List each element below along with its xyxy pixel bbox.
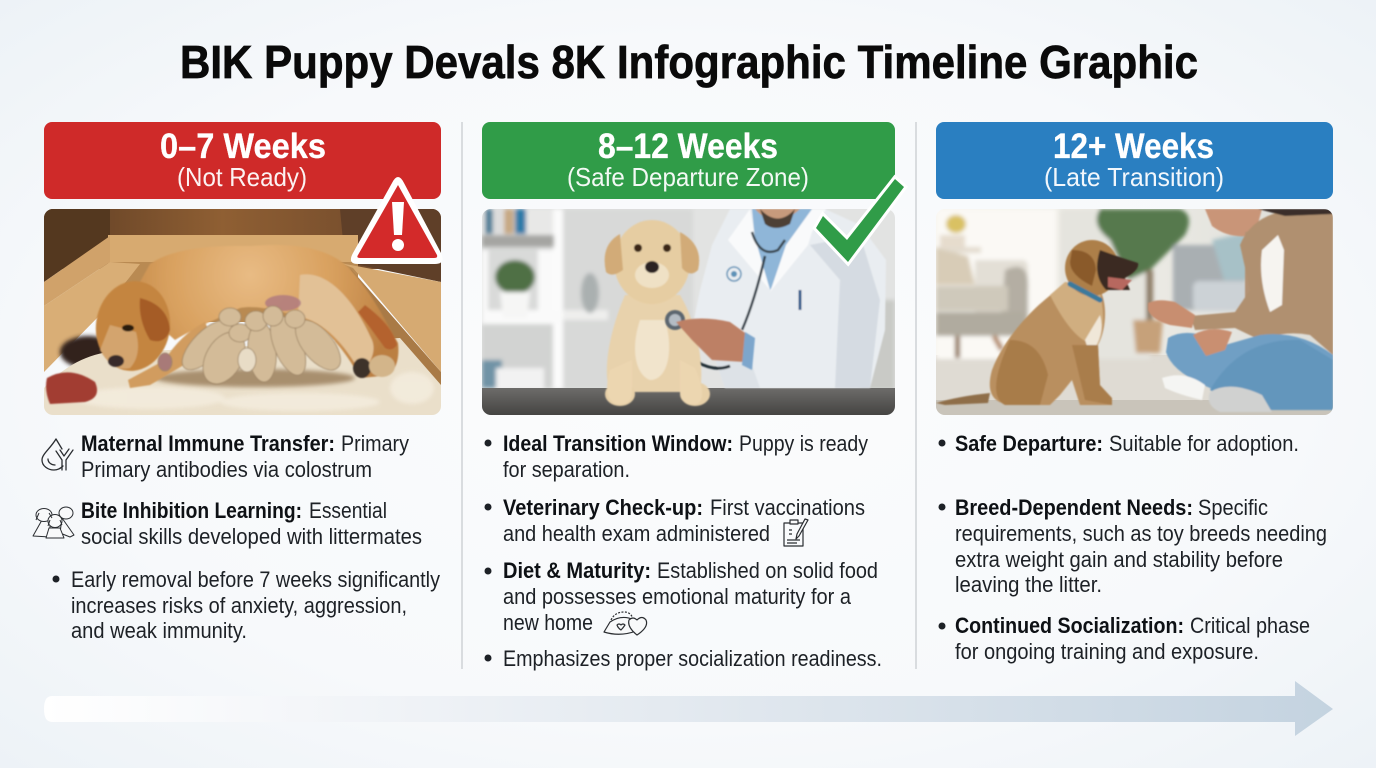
text: ideal transition window: for separation.: [503, 457, 630, 482]
header: 0-7 weeks not ready: [44, 122, 441, 199]
text: early removal warning: Early removal before 7 weeks significantly: [71, 567, 440, 592]
text: maternal immune transfer: Primary antibodies via colostrum: [81, 457, 372, 482]
text: veterinary check-up: and health exam administered: [503, 521, 770, 546]
panel: 0-7 weeks: [33, 122, 443, 643]
text: breed-dependent needs: Breed-Dependent Needs:: [955, 495, 1193, 520]
text: breed-dependent needs: [938, 495, 1327, 597]
panel: 12+ weeks: [936, 122, 1333, 664]
arrow: timeline progression: [44, 681, 1333, 736]
text: safe departure: Suitable for adoption.: [1109, 431, 1299, 456]
text: continued socialization: for ongoing training and exposure.: [955, 639, 1259, 664]
text: maternal immune transfer: Maternal Immune Transfer:: [81, 431, 335, 456]
photo: vet examining puppy: [482, 209, 895, 415]
header: 8-12 weeks safe departure zone: [482, 122, 895, 199]
panel: 8-12 weeks: [482, 122, 904, 671]
text: diet and maturity: Established on solid food: [657, 558, 878, 583]
text: continued socialization: [938, 613, 1310, 664]
icon: droplet with antibody: [42, 439, 73, 470]
icon: green check mark: [816, 179, 904, 262]
text: emphasizes socialization: Emphasizes proper socialization readiness.: [503, 646, 882, 671]
header: 0-7 weeks not ready: 0–7 Weeks: [160, 127, 326, 166]
text: ideal transition window: Puppy is ready: [739, 431, 868, 456]
header: 12+ weeks late transition: 12+ Weeks: [1053, 127, 1214, 166]
text: early removal warning: [52, 567, 440, 643]
text: breed-dependent needs: requirements, such as toy breeds needing: [955, 521, 1327, 546]
text: breed-dependent needs: leaving the litter.: [955, 572, 1102, 597]
text: continued socialization: Continued Socialization:: [955, 613, 1184, 638]
text: bite inhibition learning: Bite Inhibition Learning:: [81, 498, 302, 523]
title: BIK Puppy Devals 8K Infographic Timeline Graphic: [180, 36, 1198, 88]
text: ideal transition window: [484, 431, 868, 482]
text: early removal warning: and weak immunity.: [71, 618, 247, 643]
text: maternal immune transfer: [81, 431, 409, 482]
text: diet and maturity: new home: [503, 610, 593, 635]
text: bite inhibition learning: Essential: [309, 498, 387, 523]
text: diet and maturity: [484, 558, 878, 635]
text: veterinary check-up: Veterinary Check-up:: [503, 495, 703, 520]
text: bite inhibition learning: social skills developed with littermates: [81, 524, 422, 549]
photo: mother dog nursing puppies: [44, 209, 441, 415]
text: veterinary check-up: First vaccinations: [710, 495, 865, 520]
text: safe departure: Safe Departure:: [955, 431, 1103, 456]
icon: three puppies: [33, 507, 74, 538]
text block: early stage points: [33, 431, 440, 643]
header: 12+ weeks late transition: (Late Transition): [1044, 162, 1224, 192]
icon: clipboard with pen: [784, 519, 808, 546]
photo: owner with older puppy: [936, 209, 1333, 415]
text: continued socialization: Critical phase: [1190, 613, 1310, 638]
icon: food bowl with heart: [604, 612, 647, 635]
icon: warning triangle: [351, 177, 443, 264]
text block: safe window points: [484, 431, 882, 671]
text: diet and maturity: Diet & Maturity:: [503, 558, 651, 583]
text: veterinary check-up: [484, 495, 865, 546]
text: diet and maturity: and possesses emotional maturity for a: [503, 584, 852, 609]
header: 8-12 weeks safe departure zone: (Safe Departure Zone): [567, 162, 809, 192]
text: breed-dependent needs: Specific: [1198, 495, 1268, 520]
text: ideal transition window: Ideal Transition Window:: [503, 431, 733, 456]
text: maternal immune transfer: Primary: [341, 431, 409, 456]
text: bite inhibition learning: [81, 498, 422, 549]
text block: late stage points: [938, 431, 1327, 664]
text: breed-dependent needs: extra weight gain and stability before: [955, 547, 1283, 572]
header: 0-7 weeks not ready: (Not Ready): [177, 162, 307, 192]
text: early removal warning: increases risks of anxiety, aggression,: [71, 593, 407, 618]
header: 8-12 weeks safe departure zone: 8–12 Weeks: [598, 127, 778, 166]
text: safe departure: [938, 431, 1299, 456]
header: 12+ weeks late transition: [936, 122, 1333, 199]
